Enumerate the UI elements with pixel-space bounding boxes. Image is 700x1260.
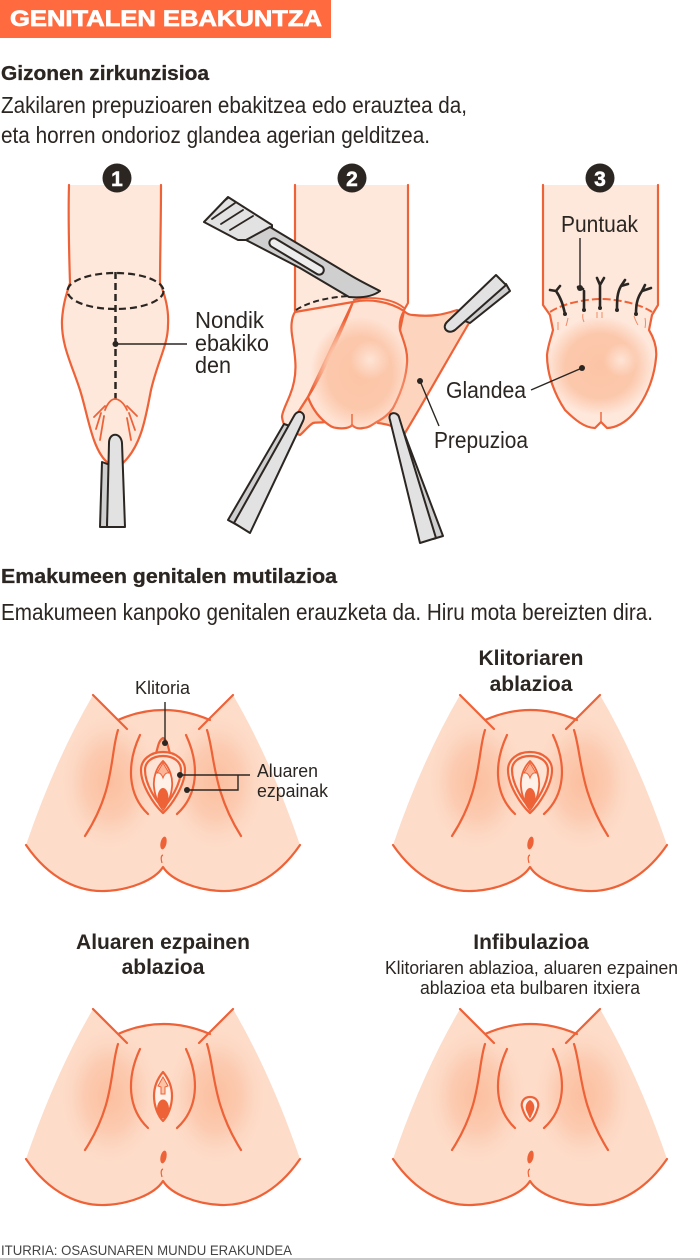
panel: step 2	[204, 185, 528, 543]
forceps	[100, 435, 125, 527]
glans shading	[310, 317, 410, 429]
label: Prepuzioa	[417, 378, 528, 453]
step number 1	[102, 164, 132, 192]
panel: Aluaren ezpainen ablazioa	[26, 931, 300, 1205]
glans	[308, 300, 407, 428]
description: Klitoriaren ablazioa, aluaren ezpainen	[385, 958, 678, 978]
step number 2	[338, 164, 366, 192]
diagram	[26, 1009, 300, 1205]
forceps upper right	[445, 275, 510, 332]
diagram	[393, 695, 667, 891]
heading: Aluaren ezpainen	[76, 931, 250, 954]
text block: male circumcision description: eta horren ondorioz glandea agerian gelditzea.	[1, 122, 430, 148]
label: Nondik ebakiko den: Nondik	[195, 307, 264, 333]
dashed incision	[296, 296, 350, 310]
heading	[478, 647, 584, 696]
step number 2: 2	[346, 168, 358, 191]
text block: male circumcision description	[1, 92, 467, 148]
heading: male circumcision: Gizonen zirkunzisioa	[1, 63, 210, 85]
incision line	[550, 299, 652, 312]
heading: Infibulazioa	[473, 931, 589, 954]
label: Puntuak	[561, 211, 638, 291]
step number 3: 3	[594, 168, 606, 191]
description	[385, 958, 678, 998]
heading: Klitoriaren	[478, 647, 584, 670]
label: Glandea: Glandea	[446, 377, 526, 403]
label: Nondik ebakiko den: ebakiko	[195, 330, 269, 356]
label: Glandea	[446, 365, 585, 403]
panel: step 1	[62, 185, 269, 527]
label: Aluaren ezpainak: ezpainak	[257, 781, 329, 801]
label: Prepuzioa: Prepuzioa	[434, 427, 528, 453]
label: Aluaren ezpainak	[177, 761, 329, 801]
forceps lower right	[389, 413, 443, 543]
stitches	[550, 278, 651, 316]
heading: ablazioa	[122, 956, 205, 979]
label: Aluaren ezpainak: Aluaren	[257, 761, 318, 781]
dashed cut line	[68, 272, 164, 399]
text block: male circumcision description: Zakilaren prepuzioaren ebakitzea edo erauztea da,	[1, 92, 467, 118]
title: GENITALEN EBAKUNTZA	[10, 6, 322, 31]
panel: Klitoriaren ablazioa	[393, 647, 667, 891]
source: ITURRIA: OSASUNAREN MUNDU ERAKUNDEA	[1, 1242, 293, 1258]
diagram	[393, 1009, 667, 1205]
label: Nondik ebakiko den: den	[195, 352, 231, 378]
label: Klitoria	[135, 678, 191, 746]
foreskin folds	[94, 399, 137, 440]
panel: step 3	[446, 185, 658, 428]
panel: anatomy reference	[26, 678, 329, 891]
label: Klitoria: Klitoria	[135, 678, 191, 698]
forceps left	[228, 412, 304, 533]
label: Puntuak: Puntuak	[561, 211, 638, 237]
step number 1: 1	[111, 168, 123, 191]
label: Nondik ebakiko den	[112, 307, 269, 378]
heading: ablazioa	[490, 673, 573, 696]
glans shading	[546, 316, 654, 416]
heading	[76, 931, 250, 979]
foreskin pulled back	[282, 302, 353, 428]
title	[0, 0, 331, 38]
step number 3	[586, 164, 614, 192]
heading: female genital mutilation: Emakumeen genitalen mutilazioa	[1, 566, 338, 588]
panel: Infibulazioa	[385, 931, 678, 1205]
scalpel	[204, 197, 380, 297]
description: ablazioa eta bulbaren itxiera	[420, 978, 641, 998]
small folds	[558, 312, 646, 330]
